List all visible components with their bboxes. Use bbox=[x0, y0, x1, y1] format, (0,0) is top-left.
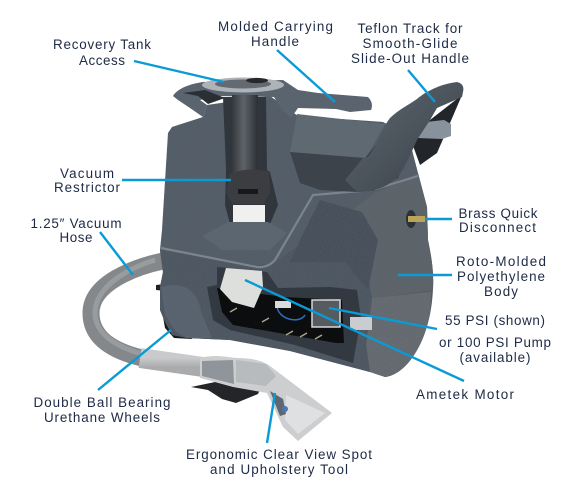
top plate with molded carrying handle bbox=[173, 80, 372, 118]
clear upholstery tool bbox=[200, 356, 332, 441]
label: vacuum restrictor: Restrictor bbox=[54, 180, 121, 195]
label: recovery tank access: Access bbox=[79, 53, 125, 68]
label: molded carrying handle: Handle bbox=[251, 34, 299, 49]
pump bbox=[312, 300, 340, 327]
label: brass quick disconnect: Disconnect bbox=[459, 220, 536, 235]
right body panel bbox=[366, 292, 431, 377]
label: vacuum hose: Hose bbox=[60, 230, 92, 245]
ametek motor bbox=[220, 268, 263, 308]
label: roto-molded body: Body bbox=[484, 284, 518, 299]
recessed panel bbox=[290, 200, 378, 290]
label: pump: (available) bbox=[460, 350, 530, 365]
label: wheels: Double Ball Bearing bbox=[34, 395, 170, 410]
spot tool lever bbox=[191, 381, 262, 403]
label: teflon track: Slide-Out Handle bbox=[351, 51, 469, 66]
body seam bbox=[161, 176, 418, 267]
motor and pump window bbox=[207, 267, 372, 363]
slide-out handle bbox=[345, 82, 463, 192]
vacuum hose bbox=[91, 260, 203, 367]
label: wheels: Urethane Wheels bbox=[44, 410, 160, 425]
label: vacuum hose: 1.25″ Vacuum bbox=[30, 216, 122, 231]
label: teflon track: Smooth-Glide bbox=[362, 36, 458, 51]
wheel housing bbox=[161, 285, 212, 338]
dark handle base bbox=[290, 130, 412, 192]
vacuum restrictor cavity bbox=[202, 95, 287, 250]
recovery tank lid bbox=[202, 78, 284, 92]
label: recovery tank access: Recovery Tank bbox=[53, 37, 151, 52]
lower body bbox=[160, 215, 372, 372]
handle deck bbox=[290, 114, 385, 158]
label: molded carrying handle: Molded Carrying bbox=[218, 19, 333, 34]
wheel bbox=[162, 311, 192, 339]
label: pump: 55 PSI (shown) bbox=[445, 313, 545, 328]
main body bbox=[160, 96, 433, 377]
label: vacuum restrictor: Vacuum bbox=[60, 166, 114, 181]
body texture bbox=[160, 96, 433, 377]
label: roto-molded body: Roto-Molded bbox=[456, 254, 546, 269]
illustration: extractor machine bbox=[91, 78, 463, 441]
handle bracket bbox=[412, 95, 462, 165]
label: pump: or 100 PSI Pump bbox=[439, 335, 551, 350]
brass quick disconnect bbox=[406, 210, 425, 228]
label: ametek motor: Ametek Motor bbox=[416, 387, 515, 402]
label: upholstery tool: Ergonomic Clear View Spot bbox=[186, 447, 372, 462]
label: roto-molded body: Polyethylene bbox=[457, 269, 545, 284]
callout lines bbox=[98, 50, 464, 443]
dark plate recess bbox=[183, 90, 225, 104]
hose barb bbox=[417, 120, 451, 139]
label: brass quick disconnect: Brass Quick bbox=[458, 206, 538, 221]
label: upholstery tool: and Upholstery Tool bbox=[210, 462, 348, 477]
label: teflon track: Teflon Track for bbox=[358, 21, 463, 36]
